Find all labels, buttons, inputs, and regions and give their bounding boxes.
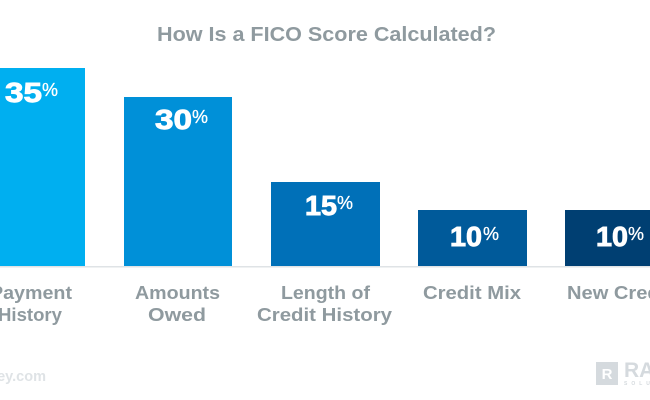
bar: Amounts Owed 30%: % — [192, 107, 208, 127]
bar: New Credit 10%: 10 — [596, 221, 628, 252]
bar: Credit Mix 10% — [418, 210, 527, 266]
bar: Length of Credit History 15% — [271, 182, 380, 266]
label: Length of Credit History — [257, 282, 393, 325]
logo: Ramsey Solutions — [596, 359, 650, 387]
bar: Credit Mix 10%: 10 — [450, 221, 482, 252]
bar: Length of Credit History 15%: % — [337, 193, 353, 213]
label: Payment History — [0, 282, 72, 325]
bar: Amounts Owed 30%: 30 — [155, 104, 192, 135]
bar: Amounts Owed 30% — [124, 97, 232, 266]
bar: Payment History 35% — [0, 68, 85, 266]
label: Amounts Owed: Amounts — [135, 282, 220, 303]
bar: Payment History 35%: 35 — [5, 77, 42, 108]
label: Length of Credit History: Credit History — [257, 304, 393, 325]
label: Credit Mix: Credit Mix — [423, 282, 522, 303]
bar: New Credit 10%: % — [628, 224, 644, 244]
logo: Ramsey Solutions: R — [602, 366, 613, 383]
bar: Credit Mix 10%: % — [483, 224, 499, 244]
title: How Is a FICO Score Calculated? — [157, 23, 496, 46]
label: Amounts Owed — [135, 282, 220, 325]
bar: Payment History 35%: % — [42, 80, 58, 100]
bar: New Credit 10% — [565, 210, 650, 266]
label: Amounts Owed: Owed — [148, 304, 206, 325]
label: Length of Credit History: Length of — [281, 282, 371, 303]
bar: Length of Credit History 15%: 15 — [305, 190, 337, 221]
